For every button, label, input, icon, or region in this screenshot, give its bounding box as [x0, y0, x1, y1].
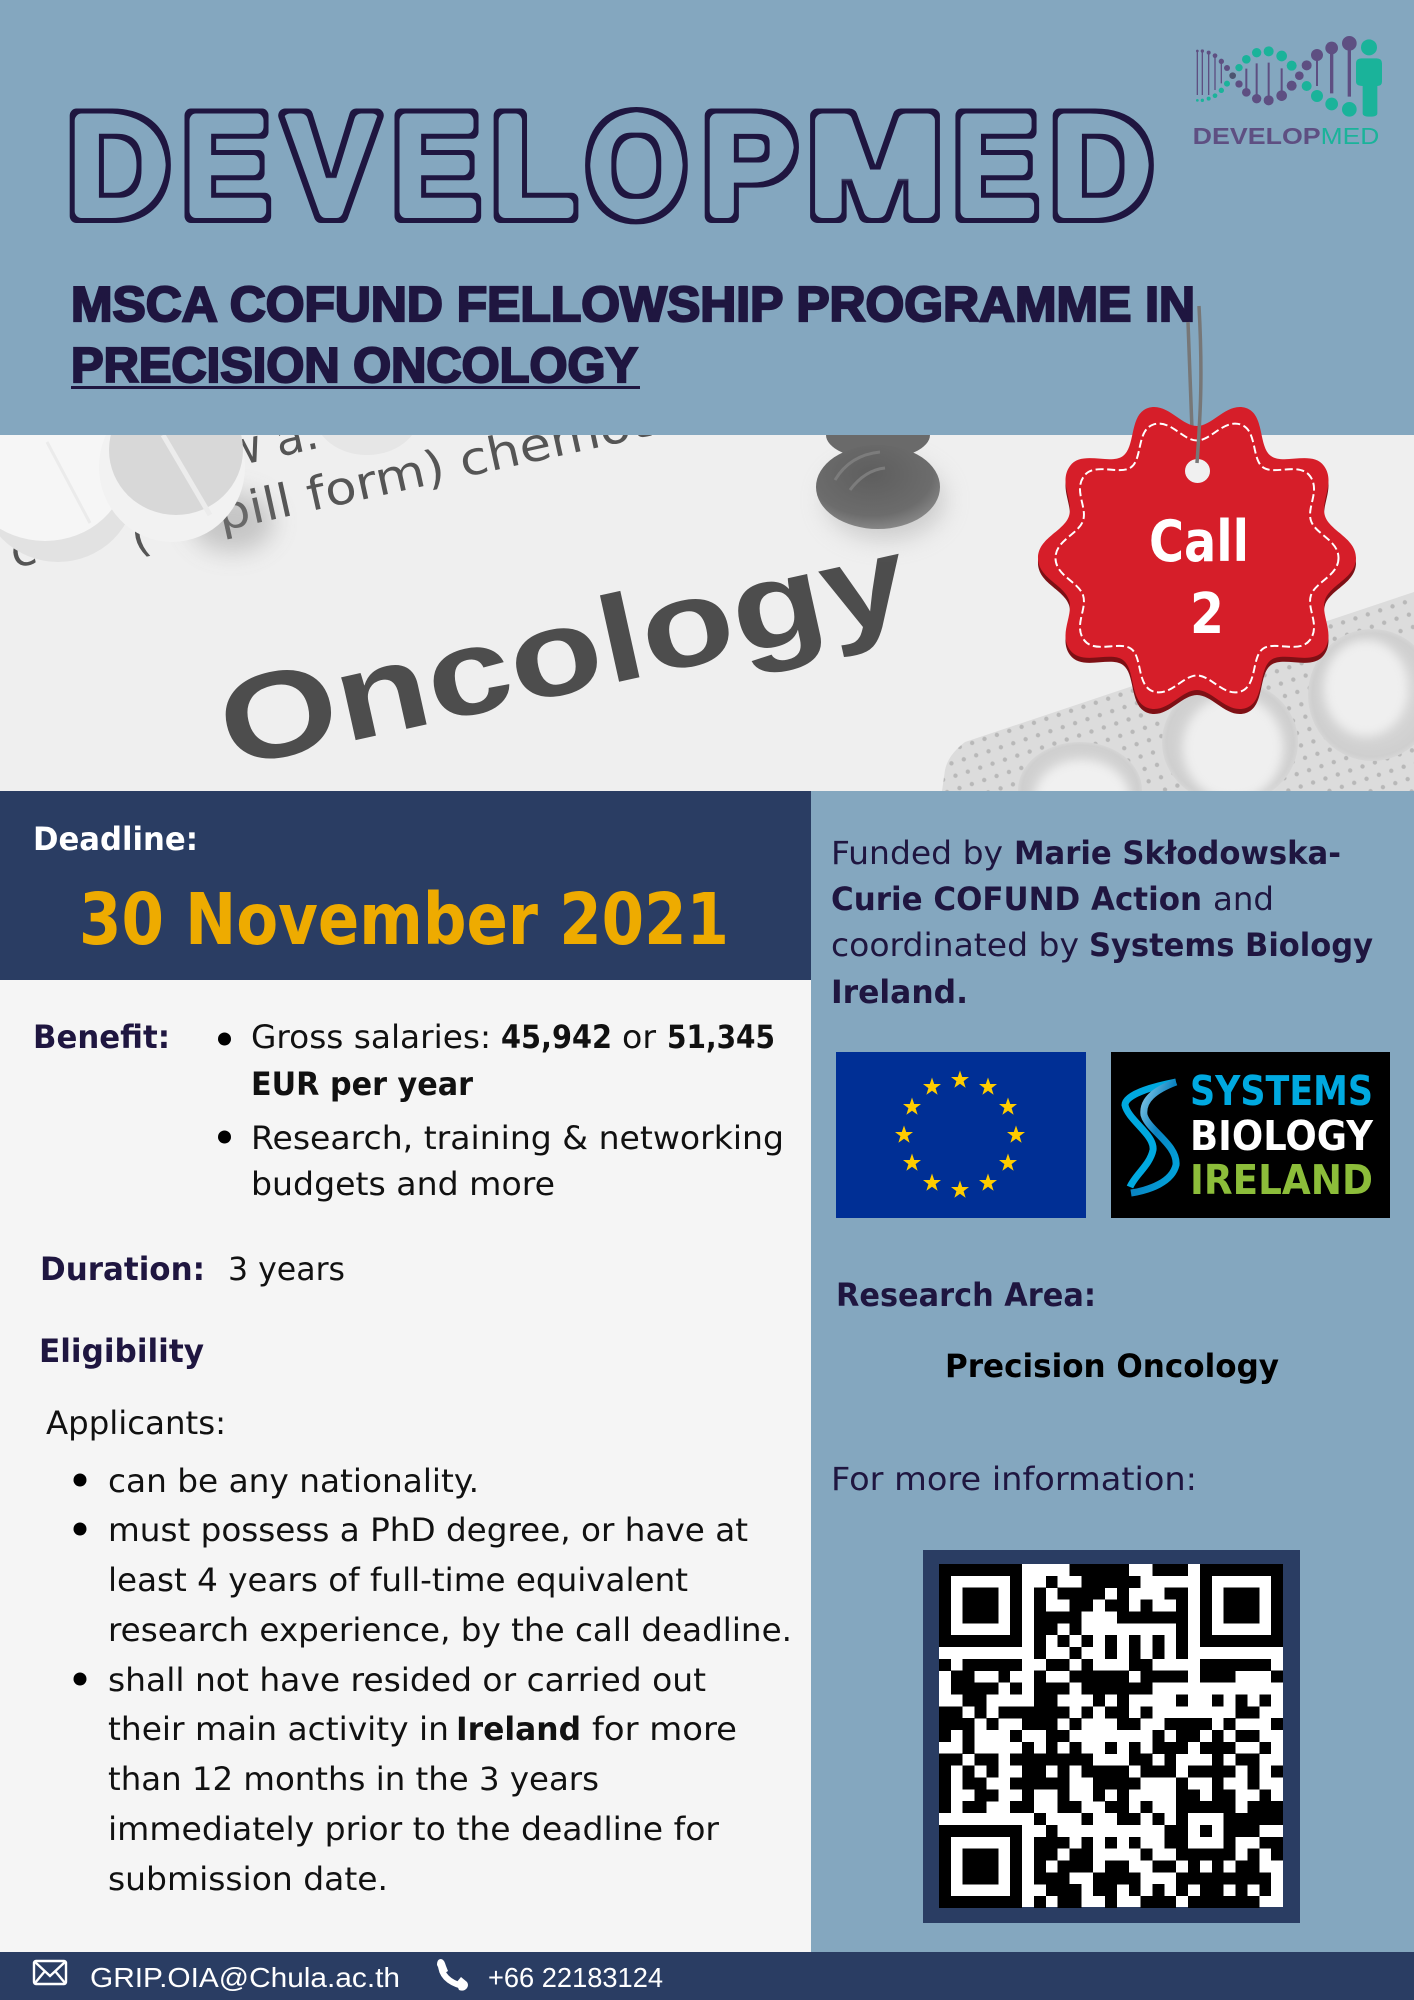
eligibility list: can be any nationality.: [108, 1462, 479, 1500]
logo: Systems Biology Ireland: BIOLOGY: [1190, 1112, 1374, 1160]
pills: dark capsules: [816, 411, 945, 540]
funding text: and: [1213, 880, 1274, 918]
title: DEVELOPMED outlined: L: [491, 84, 576, 247]
icon: envelope: [34, 1961, 66, 1984]
title: DEVELOPMED outlined: O: [586, 84, 687, 247]
photo: oncology page with pills: [0, 435, 1414, 791]
pills: white tablets: [0, 435, 412, 562]
title: DEVELOPMED outlined: D: [1050, 84, 1153, 247]
panel: deadline: 30 November 2021: [79, 878, 729, 961]
funding text: Systems Biology: [1089, 926, 1373, 964]
badge: hole: [1185, 459, 1210, 483]
benefit: or: [622, 1018, 657, 1056]
eligibility list: Ireland: [456, 1710, 581, 1748]
eligibility list: immediately prior to the deadline for: [108, 1810, 720, 1848]
benefit: Benefit:: [33, 1018, 170, 1056]
panel: details: [0, 980, 811, 1952]
photo text: Oncology: Oncology: [206, 509, 919, 793]
eligibility list: for more: [592, 1710, 737, 1748]
panel: deadline: [0, 791, 811, 980]
eligibility list: Applicants:: [46, 1404, 226, 1442]
eligibility list: must possess a PhD degree, or have at: [108, 1511, 748, 1549]
benefit: [33, 1018, 784, 1203]
eligibility list: [46, 1404, 792, 1898]
blister pack: [942, 592, 1414, 791]
benefit: 45,942: [501, 1018, 612, 1056]
badge: text: [1149, 509, 1249, 647]
title: DEVELOPMED outlined: D: [67, 84, 170, 247]
research area: Research Area:: [836, 1276, 1096, 1314]
contact: phone: +66 22183124: [488, 1962, 663, 1993]
research area: Precision Oncology: [945, 1347, 1279, 1385]
benefit: Research, training & networking: [251, 1119, 784, 1157]
eligibility list: than 12 months in the 3 years: [108, 1760, 599, 1798]
logo: Systems Biology Ireland: IRELAND: [1190, 1156, 1373, 1204]
badge: red scalloped tag: [1038, 407, 1356, 714]
title: DEVELOPMED outlined: P: [702, 84, 797, 247]
logo: DEVELOPMED: DEVELOP: [1193, 123, 1321, 149]
photo text: page copy: w a.: [219, 405, 323, 479]
footer bar: [0, 1952, 1414, 2000]
subtitle: MSCA COFUND FELLOWSHIP PROGRAMME IN: [71, 278, 1195, 332]
badge: front string: [1197, 306, 1201, 463]
funding text: Ireland.: [831, 973, 968, 1011]
more information label: For more information:: [831, 1460, 1197, 1498]
subtitle: PRECISION ONCOLOGY: [71, 339, 638, 393]
title: DEVELOPMED outlined: E: [953, 84, 1038, 247]
badge: back string: [1188, 322, 1192, 430]
benefit: EUR per year: [251, 1065, 473, 1103]
subtitle: [71, 278, 1195, 393]
eligibility list: least 4 years of full-time equivalent: [108, 1561, 688, 1599]
photo text: page copy: [5, 386, 687, 579]
eligibility list: research experience, by the call deadline.: [108, 1611, 792, 1649]
title: DEVELOPMED outlined: [67, 84, 1153, 247]
badge: Call 2: [1038, 306, 1356, 714]
funding text: [831, 834, 1373, 1011]
benefit: 51,345: [667, 1018, 775, 1056]
badge: text: Call: [1149, 509, 1249, 575]
research area: [836, 1276, 1279, 1385]
benefit: budgets and more: [251, 1165, 555, 1203]
duration: 3 years: [228, 1250, 345, 1288]
eligibility list: their main activity in: [108, 1710, 449, 1748]
logo: Systems Biology Ireland: [1111, 1052, 1390, 1218]
title: DEVELOPMED outlined: E: [392, 84, 480, 247]
benefit: Gross salaries:: [251, 1018, 491, 1056]
eligibility list: submission date.: [108, 1860, 388, 1898]
eligibility list: shall not have resided or carried out: [108, 1661, 706, 1699]
logo: EU flag: [836, 1052, 1086, 1218]
icon: phone: [437, 1959, 468, 1991]
photo text: page copy: c: [5, 521, 41, 579]
panel: deadline: Deadline:: [33, 820, 198, 858]
title: DEVELOPMED outlined: M: [807, 84, 943, 247]
title: DEVELOPMED outlined: E: [182, 84, 270, 247]
duration: [40, 1250, 345, 1288]
QR code: [923, 1550, 1300, 1923]
photo text: page copy: (: [126, 507, 155, 564]
logo: DEVELOPMED: [1193, 36, 1382, 149]
funding text: Curie COFUND Action: [831, 880, 1202, 918]
badge: text: 2: [1190, 582, 1224, 647]
logo: Systems Biology Ireland: SYSTEMS: [1190, 1067, 1373, 1115]
funding text: Marie Skłodowska-: [1014, 834, 1341, 872]
duration: Duration:: [40, 1250, 205, 1288]
photo text: page copy: pill form) chemoth: [212, 386, 687, 542]
contact: email: GRIP.OIA@Chula.ac.th: [90, 1962, 400, 1993]
funding text: coordinated by: [831, 926, 1079, 964]
logo: DEVELOPMED: MED: [1321, 123, 1379, 149]
funding text: Funded by: [831, 834, 1003, 872]
eligibility heading: Eligibility: [39, 1332, 204, 1370]
title: DEVELOPMED outlined: V: [284, 84, 378, 247]
